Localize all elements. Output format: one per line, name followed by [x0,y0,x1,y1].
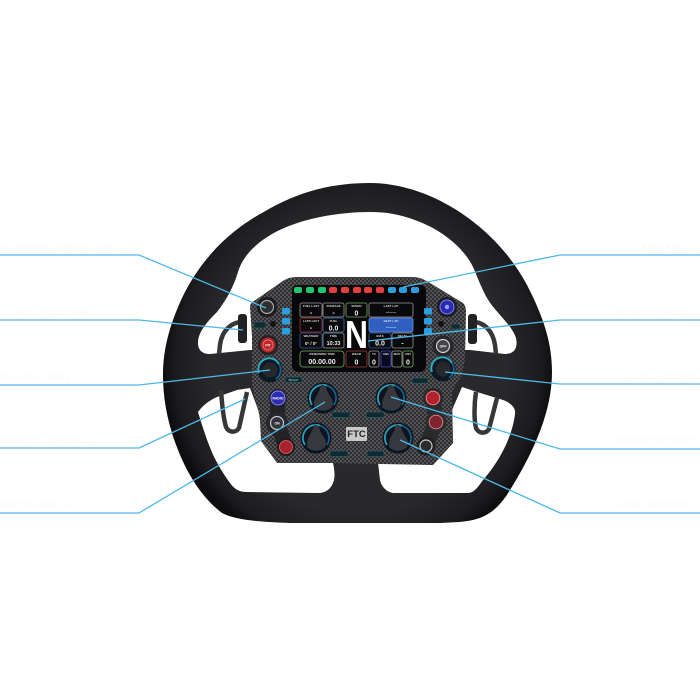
line: lower encoder right [400,440,700,513]
gear count cell: WEAR [352,352,362,356]
right paddle [469,315,497,433]
time cell: TIME [330,334,337,338]
gear indicator: N [345,314,368,357]
line: left paddle [0,399,245,448]
left paddle [219,315,247,432]
weather cell: WEATHER [304,334,319,338]
faint label: front encoders: FRONT ENCODERS [618,501,693,510]
lower left opening [198,388,334,493]
remaining time cell: 00.00.00 [308,359,336,366]
line: RGB LEDs [403,255,700,287]
tags under encoders [330,324,460,456]
laps left cell [300,318,322,332]
button: blue left [269,389,287,407]
faint label: ignition switch: IGNITION SWITCH [0,501,70,510]
fuel cell: 0.0 [329,326,338,332]
tag: left encoder: BRIGHT [289,378,299,382]
speed cell: SPEED [351,304,362,308]
line: top left button [0,255,266,308]
button: blue right [437,297,457,317]
button cluster shadow left [277,398,286,447]
button: ON: ON [274,422,280,426]
line: right encoder [445,372,700,384]
last lap cell: LAST LAP [384,304,398,308]
fuel last cell: - [310,310,313,317]
tc cell [369,351,379,367]
fuel cell: FUEL [330,319,338,323]
leader lines [0,255,700,513]
delta cell [392,333,413,348]
encoder: bottom left big [300,422,332,454]
laps left cell: - [310,325,313,332]
ant cell: 0 [406,360,410,366]
logo: FTC [347,429,366,440]
button: OFF [432,336,454,356]
button: top left grey [257,297,277,317]
average cell [323,303,344,317]
encoder: top right big [376,382,406,414]
remaining time cell: REMAINING TIME [309,352,335,356]
gear count cell [346,351,367,367]
steering wheel [163,183,552,523]
encoder: upper left [258,358,282,382]
encoder: top left big [308,382,338,414]
tc cell: 0 [372,360,376,366]
time cell [323,333,344,348]
weather cell [300,333,322,348]
button: dark red right [426,412,446,432]
tc cell: TC [372,352,377,356]
button cluster shadow right [426,398,436,446]
average cell: - [332,310,335,317]
faint label: rotary: ROTARY SWITCHES [618,436,695,445]
remaining time cell [300,351,344,367]
encoder: upper right [430,356,456,382]
button: red upper right [423,388,443,408]
button: OFF: OFF [440,344,446,348]
line: left encoder [0,370,270,385]
weather cell: 0° / 0° [305,341,317,346]
line: screen [368,320,700,341]
encoder: bottom right big [382,422,414,454]
bias cell: 0.0 [375,340,385,348]
faint label: magnetic shifters: MAGNETIC SHIFTERS [0,436,84,445]
fuel cell [323,318,344,332]
small dot right [438,321,444,327]
delta cell: DELTA [398,334,408,338]
last lap cell: --:--.--- [386,310,396,314]
logo [346,427,367,441]
LCD screen [292,285,426,372]
best lap cell [369,318,413,332]
line: left shifter [0,320,243,330]
button: PIT: PIT [265,344,272,348]
carbon button panel [250,277,466,465]
tag: left small [254,321,276,328]
right side blue LEDs [424,308,432,334]
abs cell: ABS [383,352,389,356]
faint label: illuminated push buttons: ILLUMINATED PUSH BUTTONS (12) [0,243,134,252]
lower right opening [378,387,515,493]
faint label: push encoders: PUSH ENCODERS [0,373,70,382]
ant cell [403,351,413,367]
faint label: integrated shift: INTEGRATED SHIFT [15,308,91,317]
last lap cell [369,303,413,317]
average cell: AVERAGE [326,304,341,308]
map cell: MAP [394,352,400,356]
button: PIT [258,335,278,355]
wheel rim [163,183,552,523]
speed cell: 0 [355,310,359,318]
delta cell: - [401,340,404,348]
line: big encoder left [0,402,325,513]
faint label: push encoders right: PUSH ENCODERS [630,373,700,382]
button: grey lower right [416,436,436,456]
bias cell: BIAS [376,334,384,338]
gear count cell: 0 [355,360,359,366]
left side blue LEDs [282,308,290,334]
faint label: RGB LEDs: RGB LEDS x 12 [642,243,700,252]
button: red lower left [277,438,295,456]
fuel last cell [300,303,322,317]
time cell: 10:33 [327,341,340,347]
laps left cell: LAPS LEFT [303,319,319,323]
button: ON [266,412,288,434]
button: blue left: RADIO [273,396,284,400]
speed cell [346,303,367,318]
tag: left encoder [285,377,302,382]
faint label: display: DISPLAY SCREEN [618,308,687,317]
upper opening [198,212,517,354]
best lap cell: --:--.--- [386,325,396,329]
bias cell [369,333,391,348]
shift LEDs [294,287,419,293]
line: big encoder right [391,397,700,449]
fuel last cell: FUEL LAST [303,304,319,308]
ant cell: ANT [405,352,411,356]
best lap cell: BEST LAP [384,319,398,323]
